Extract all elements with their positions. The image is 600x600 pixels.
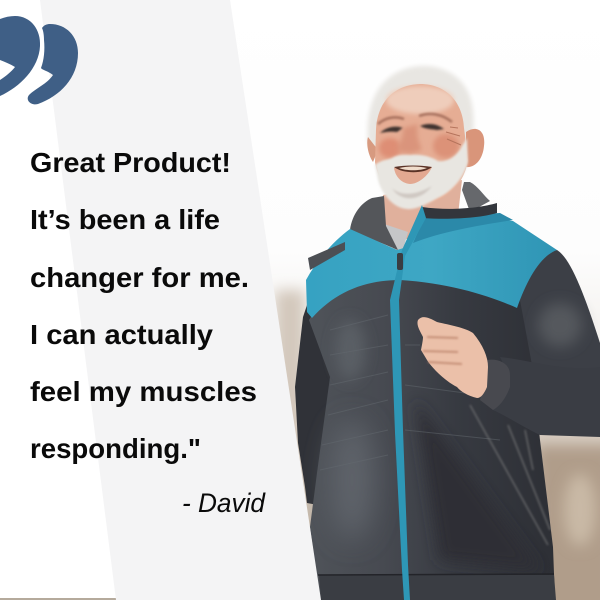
beard — [375, 138, 468, 209]
icon: closing quotation marks — [0, 16, 78, 104]
testimonial quote text: I can actually — [30, 319, 213, 350]
undershirt — [384, 224, 408, 256]
neck — [382, 180, 462, 240]
wrinkles — [446, 127, 461, 145]
runner's left arm behind body — [295, 290, 335, 505]
hand — [417, 317, 488, 398]
testimonial quote text: changer for me. — [30, 262, 249, 293]
upper right arm — [517, 250, 600, 372]
shoulder patch — [308, 242, 345, 270]
jacket torso — [309, 270, 555, 600]
zipper placket — [390, 205, 426, 600]
testimonial quote text: Great Product! — [30, 147, 231, 178]
forearm — [493, 357, 600, 437]
eyes — [380, 127, 403, 133]
testimonial quote text: feel my muscles — [30, 376, 257, 407]
face — [375, 84, 468, 205]
lower lip — [394, 166, 432, 184]
testimonial quote text — [30, 147, 257, 464]
attribution: - David — [182, 488, 266, 518]
jacket — [306, 203, 600, 600]
panel: slanted grey band — [40, 0, 321, 600]
testimonial quote text: It’s been a life — [30, 204, 220, 235]
teeth — [399, 166, 427, 170]
teal yoke — [306, 218, 557, 318]
collar — [422, 203, 497, 219]
ear — [466, 129, 484, 167]
torso highlights — [320, 315, 550, 570]
hair — [368, 66, 474, 155]
cuff — [480, 360, 510, 410]
hem — [319, 575, 556, 600]
nose — [397, 124, 422, 153]
testimonial quote text: responding." — [30, 433, 201, 464]
zipper pull — [397, 253, 403, 270]
hood back — [350, 182, 490, 250]
mouth — [394, 166, 432, 172]
hood panel — [413, 213, 513, 243]
head — [367, 66, 484, 209]
